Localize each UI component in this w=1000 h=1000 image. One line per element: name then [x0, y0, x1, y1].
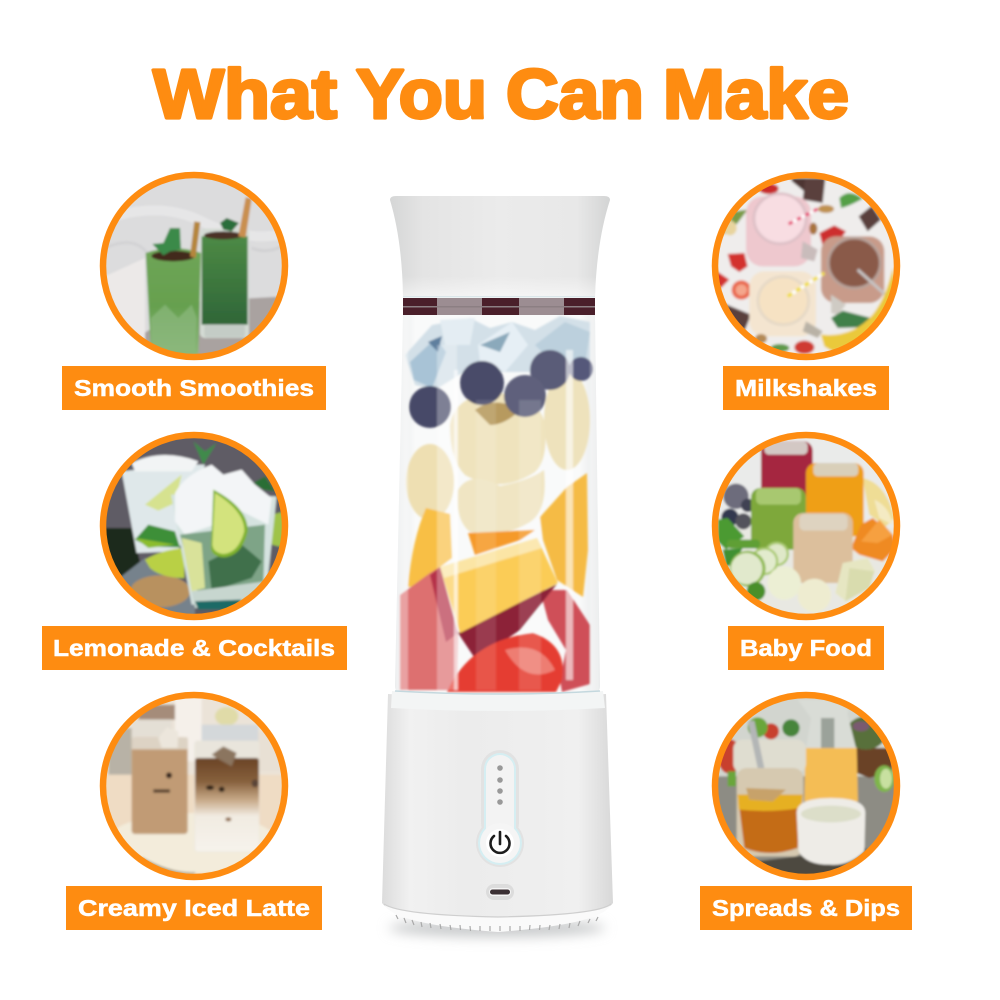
glass jar with fruit — [395, 315, 600, 695]
photo: green smoothies — [106, 178, 282, 354]
blender product photo — [382, 196, 613, 937]
usb-c port — [486, 884, 514, 900]
title — [153, 55, 849, 133]
label: Smooth Smoothies — [74, 375, 314, 401]
circle ring — [715, 695, 897, 877]
circle ring — [715, 435, 897, 617]
blender lid — [390, 196, 610, 296]
photo: iced lattes — [106, 698, 282, 874]
label — [42, 626, 347, 670]
berries — [409, 386, 451, 428]
panel: lemonade — [42, 428, 347, 670]
panel: baby food — [706, 428, 906, 670]
label: Lemonade & Cocktails — [53, 635, 335, 661]
dark seal ring — [403, 296, 595, 315]
glass ribs — [437, 345, 457, 690]
panel: smoothies — [62, 168, 326, 410]
power button — [486, 829, 514, 857]
label: Spreads & Dips — [712, 895, 900, 921]
circle ring — [715, 175, 897, 357]
circle ring — [103, 695, 285, 877]
label — [723, 366, 889, 410]
photo: dressings and dips — [718, 698, 894, 874]
indicator dots — [497, 765, 503, 805]
title: Make — [663, 55, 849, 133]
label — [62, 366, 326, 410]
photo: baby food jars — [718, 438, 894, 614]
label: Milkshakes — [735, 375, 877, 401]
title: You — [356, 55, 487, 133]
photo: milkshakes — [718, 178, 894, 354]
oranges — [408, 508, 452, 587]
panel: latte — [66, 688, 322, 930]
label: Creamy Iced Latte — [78, 895, 310, 921]
title: What — [153, 55, 337, 133]
panel: spreads — [700, 688, 912, 930]
circle ring — [103, 435, 285, 617]
blender base — [382, 691, 613, 932]
label — [728, 626, 884, 670]
label — [66, 886, 322, 930]
ice — [405, 316, 590, 390]
label: Baby Food — [740, 635, 872, 661]
banana — [544, 370, 590, 470]
vent slots — [396, 915, 598, 931]
title: Can — [506, 55, 644, 133]
control panel — [476, 750, 524, 867]
circle ring — [103, 175, 285, 357]
panel: milkshakes — [706, 168, 906, 410]
photo: lemonade glasses — [106, 438, 282, 614]
label — [700, 886, 912, 930]
